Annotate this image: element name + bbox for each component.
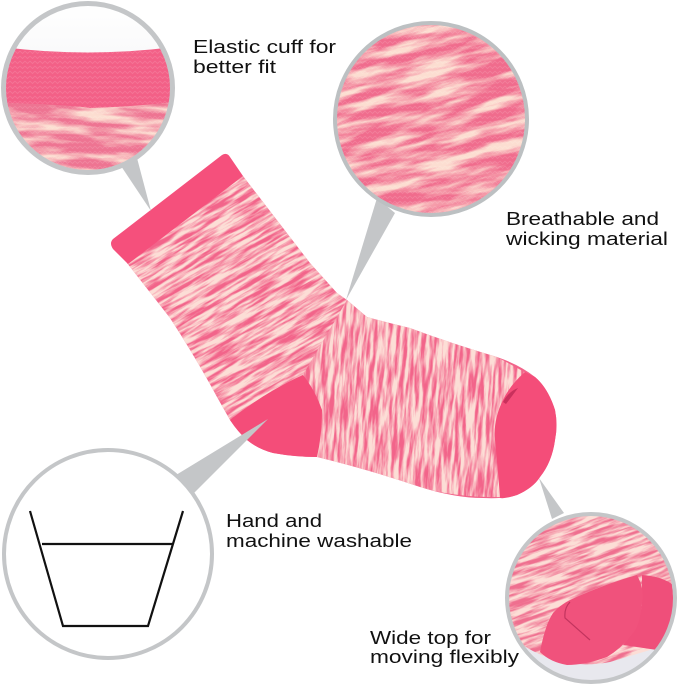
sock <box>111 154 556 498</box>
sock foot streaks <box>303 300 530 497</box>
sock toe <box>495 372 556 498</box>
sock leg streaks <box>127 176 347 420</box>
magnifier: washing icon <box>4 450 212 658</box>
label: breathable: Breathable and <box>506 208 659 229</box>
callout pointers <box>121 158 564 519</box>
label: breathable <box>505 208 668 249</box>
icon: wash tub <box>30 511 183 626</box>
label: washable: Hand and <box>226 510 322 531</box>
label: washable <box>226 510 412 551</box>
magnifier: elastic cuff <box>2 2 174 174</box>
label: breathable: wicking material <box>505 228 668 249</box>
sock cuff <box>111 154 243 264</box>
label: elastic cuff <box>193 36 336 77</box>
label: elastic cuff: better fit <box>193 56 276 77</box>
magnifier: toe detail <box>507 514 675 683</box>
sock heel <box>230 375 322 457</box>
label: wide top: Wide top for <box>370 627 491 648</box>
label: washable: machine washable <box>226 530 412 551</box>
label: wide top <box>370 627 520 667</box>
magnifier: breathable material <box>335 23 527 215</box>
label: wide top: moving flexibly <box>370 646 520 667</box>
toe crease <box>503 388 518 404</box>
label: elastic cuff: Elastic cuff for <box>193 36 336 57</box>
sock body with marled knit <box>127 176 556 498</box>
